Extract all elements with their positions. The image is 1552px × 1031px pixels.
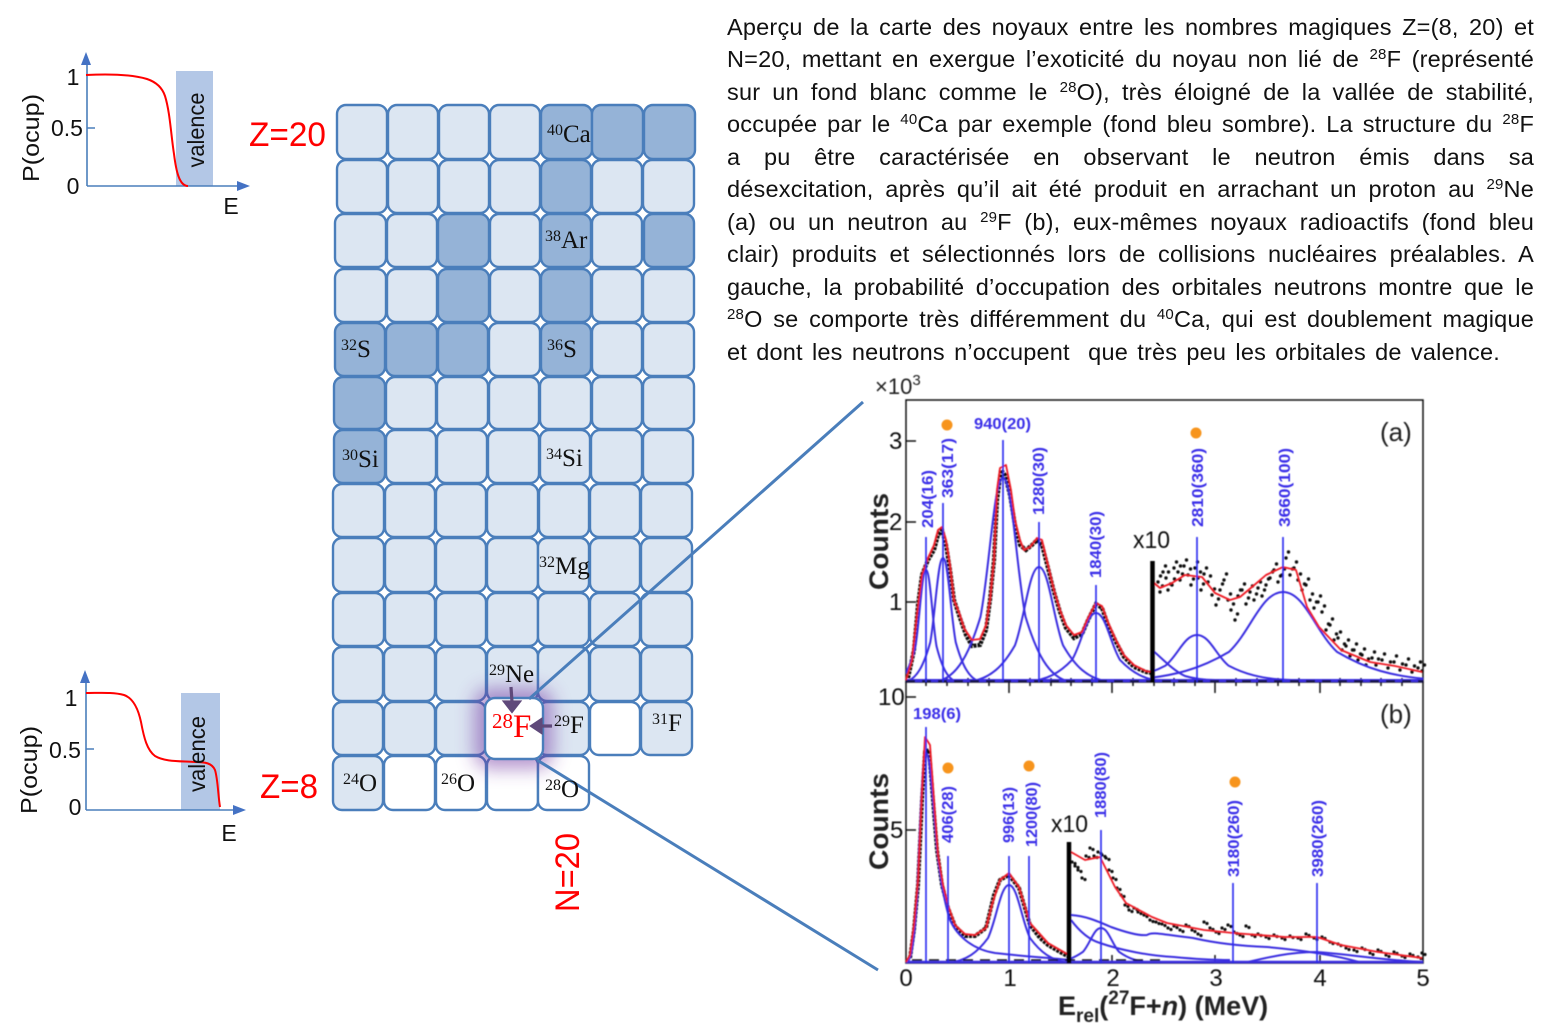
text block: description: 28O se comporte très différemment du 40Ca, qui est doublement magique <box>727 306 1534 332</box>
nucleus labels: 32 <box>539 554 555 571</box>
spectrum panel (a): 2810(360) <box>1190 448 1207 527</box>
occupation chart: Z=20: 0 <box>67 173 79 199</box>
x-axis labels: 3 <box>1209 965 1223 992</box>
occupation chart: Z=8 <box>16 670 246 846</box>
valence band <box>176 71 213 186</box>
text block: description: Aperçu de la carte des noyaux entre les nombres magiques Z=(8, 20) et <box>727 14 1534 40</box>
spectrum panel (b): 3180(260) <box>1226 800 1243 877</box>
label: N=20: N=20 <box>549 833 587 912</box>
nucleus labels: 34 <box>546 446 562 463</box>
occupation chart: Z=20 <box>18 52 250 219</box>
nucleus labels: 30 <box>342 447 358 464</box>
spectrum panel (a): 3660(100) <box>1277 448 1294 527</box>
total fit <box>906 465 1152 680</box>
nucleus labels: 28 <box>545 777 561 794</box>
spectrum panel (a): Counts <box>864 493 894 590</box>
nucleus labels: 26 <box>441 771 457 788</box>
panel tag: (a) <box>1380 417 1412 447</box>
x-axis title: 27 <box>1108 988 1129 1009</box>
zoom connector to spectra <box>529 402 878 970</box>
data points <box>910 750 1069 958</box>
occupation curve <box>86 693 220 807</box>
x10 marker <box>1150 561 1155 682</box>
text block: description: sur un fond blanc comme le 28O), très éloigné de la vallée de stabilité, <box>727 78 1534 104</box>
spectrum panel (a): 363(17) <box>940 438 957 498</box>
orange markers <box>942 420 952 430</box>
axis labels: 1 <box>67 64 79 90</box>
nucleus labels: 28 <box>492 709 513 733</box>
peak labels: 204(16) <box>920 470 937 528</box>
nucleus labels: Si <box>562 445 583 472</box>
nucleus labels: 32 <box>341 337 357 354</box>
nucleus labels: 29 <box>554 713 570 730</box>
occupation chart: Z=8: E <box>221 820 237 846</box>
nucleus labels: 24 <box>343 771 359 788</box>
orange markers <box>942 762 954 774</box>
nucleus labels: Ne <box>505 661 534 688</box>
valence band <box>181 693 220 810</box>
spectrum panel (b): 5 <box>890 817 903 844</box>
text block: description: (a) ou un neutron au 29F (b), eux-mêmes noyaux radioactifs (fond bleu <box>727 208 1534 234</box>
axis labels: 1 <box>65 685 77 711</box>
nucleus labels: 36 <box>547 337 563 354</box>
panel tag: (b) <box>1380 699 1412 729</box>
x-axis labels: 5 <box>1416 965 1430 992</box>
spectra figure <box>864 372 1445 1027</box>
spectrum panel (a): x10 <box>1133 527 1170 554</box>
arrow: 29F to 28F <box>532 720 552 732</box>
label: Z=20: Z=20 <box>249 116 326 154</box>
spectrum panel (a): 2 <box>889 509 902 536</box>
nucleus labels: 29 <box>489 662 505 679</box>
axes <box>87 58 243 186</box>
nucleus labels: Si <box>358 446 379 473</box>
y-axis labels: 3 <box>889 428 902 455</box>
peak labels: 198(6) <box>913 706 961 723</box>
nucleus labels: Mg <box>555 553 590 580</box>
spectrum panel (a): 1840(30) <box>1088 511 1105 578</box>
nucleus labels: 31 <box>652 711 668 728</box>
cell: 28F <box>485 698 543 759</box>
x-axis title: n) (MeV) <box>1162 991 1268 1021</box>
text block: description: occupée par le 40Ca par exemple (fond bleu sombre). La structure du 28F <box>727 111 1534 137</box>
spectrum panel (b): 1880(80) <box>1093 752 1110 818</box>
occupation chart: Z=8: P(ocup) <box>16 726 42 814</box>
spectrum panel (a): 1280(30) <box>1031 447 1048 515</box>
peak lines <box>926 440 1283 682</box>
spectrum panel (a): ×10 <box>875 374 912 399</box>
spectrum panel (b): 1200(80) <box>1024 782 1041 847</box>
nucleus labels: Ar <box>561 227 588 254</box>
nucleus labels: F <box>668 710 682 737</box>
nuclei chart grid <box>333 105 695 810</box>
fit components <box>905 476 1152 680</box>
occupation chart: Z=8: 0 <box>69 794 81 820</box>
occupation curve <box>86 74 188 186</box>
nucleus labels: O <box>457 770 475 797</box>
occupation chart: Z=20: E <box>223 193 239 219</box>
text block: description: et dont les neutrons n’occupent que très peu les orbitales de valence. <box>727 338 1500 364</box>
total fit <box>906 737 1069 962</box>
occupation chart: Z=20: 0.5 <box>51 115 83 141</box>
nucleus labels: 38 <box>545 228 561 245</box>
data points <box>908 470 1152 678</box>
x-axis title: E <box>1058 991 1076 1021</box>
nucleus labels: 40 <box>547 122 563 139</box>
x10 marker <box>1067 842 1071 963</box>
peak lines <box>926 727 1317 963</box>
spectrum panel (b): Counts <box>864 773 894 870</box>
spectrum panel (a): 1 <box>889 589 902 616</box>
spectrum panel (b): 996(13) <box>1001 787 1018 843</box>
spectrum panel (a) <box>864 372 1445 693</box>
text block: description: gauche, la probabilité d’occupation des orbitales neutrons montre que le <box>727 274 1534 300</box>
nucleus labels: O <box>359 770 377 797</box>
nucleus labels: O <box>561 776 579 803</box>
spectrum panel (b): 406(28) <box>940 786 957 843</box>
nucleus labels: S <box>357 336 371 363</box>
frame and ticks <box>906 682 1423 963</box>
nucleus labels <box>341 121 682 803</box>
text block: description: clair) produits et sélectionnés lors de collisions nucléaires préalables. A <box>727 241 1534 267</box>
x-axis title: ( <box>1099 991 1108 1021</box>
nucleus labels: Ca <box>563 121 591 148</box>
spectrum panel (b): 3980(260) <box>1310 800 1327 877</box>
y-axis labels: 10 <box>878 684 905 711</box>
occupation chart: Z=8: 0.5 <box>49 737 81 763</box>
x-axis title: F+ <box>1129 991 1162 1021</box>
spectrum panel (a): 3 <box>912 372 921 389</box>
text block: description: désexcitation, après qu’il ait été produit en arrachant un proton au 29Ne <box>727 176 1534 202</box>
axes <box>86 676 239 810</box>
text block: description <box>727 14 1534 365</box>
x-axis labels: 1 <box>1003 965 1017 992</box>
x-axis labels: 2 <box>1106 965 1120 992</box>
spectrum panel (a): 940(20) <box>974 416 1031 433</box>
spectrum panel (b) <box>864 682 1430 1027</box>
nucleus labels: F <box>570 712 584 739</box>
x-axis labels <box>899 965 1430 992</box>
occupation chart: Z=20: P(ocup) <box>18 94 44 182</box>
nucleus labels: F <box>513 709 531 745</box>
spectrum panel (b): x10 <box>1051 811 1088 838</box>
label: Z=8: Z=8 <box>260 768 318 806</box>
x-axis title: rel <box>1076 1006 1099 1027</box>
text block: description: a pu être caractérisée en observant le neutron émis dans sa <box>727 144 1534 170</box>
occupation chart: Z=8: valence <box>184 716 210 792</box>
arrow: 29Ne to 28F <box>505 687 519 711</box>
x-axis labels: 0 <box>899 965 913 992</box>
frame and ticks <box>906 400 1423 693</box>
occupation chart: Z=20: valence <box>183 92 209 168</box>
nucleus labels: S <box>563 336 577 363</box>
fit components <box>906 753 1072 963</box>
x-axis labels: 4 <box>1313 965 1327 992</box>
text block: description: N=20, mettant en exergue l’exoticité du noyau non lié de 28F (représenté <box>727 46 1534 72</box>
purple glow around 28F <box>474 688 553 769</box>
